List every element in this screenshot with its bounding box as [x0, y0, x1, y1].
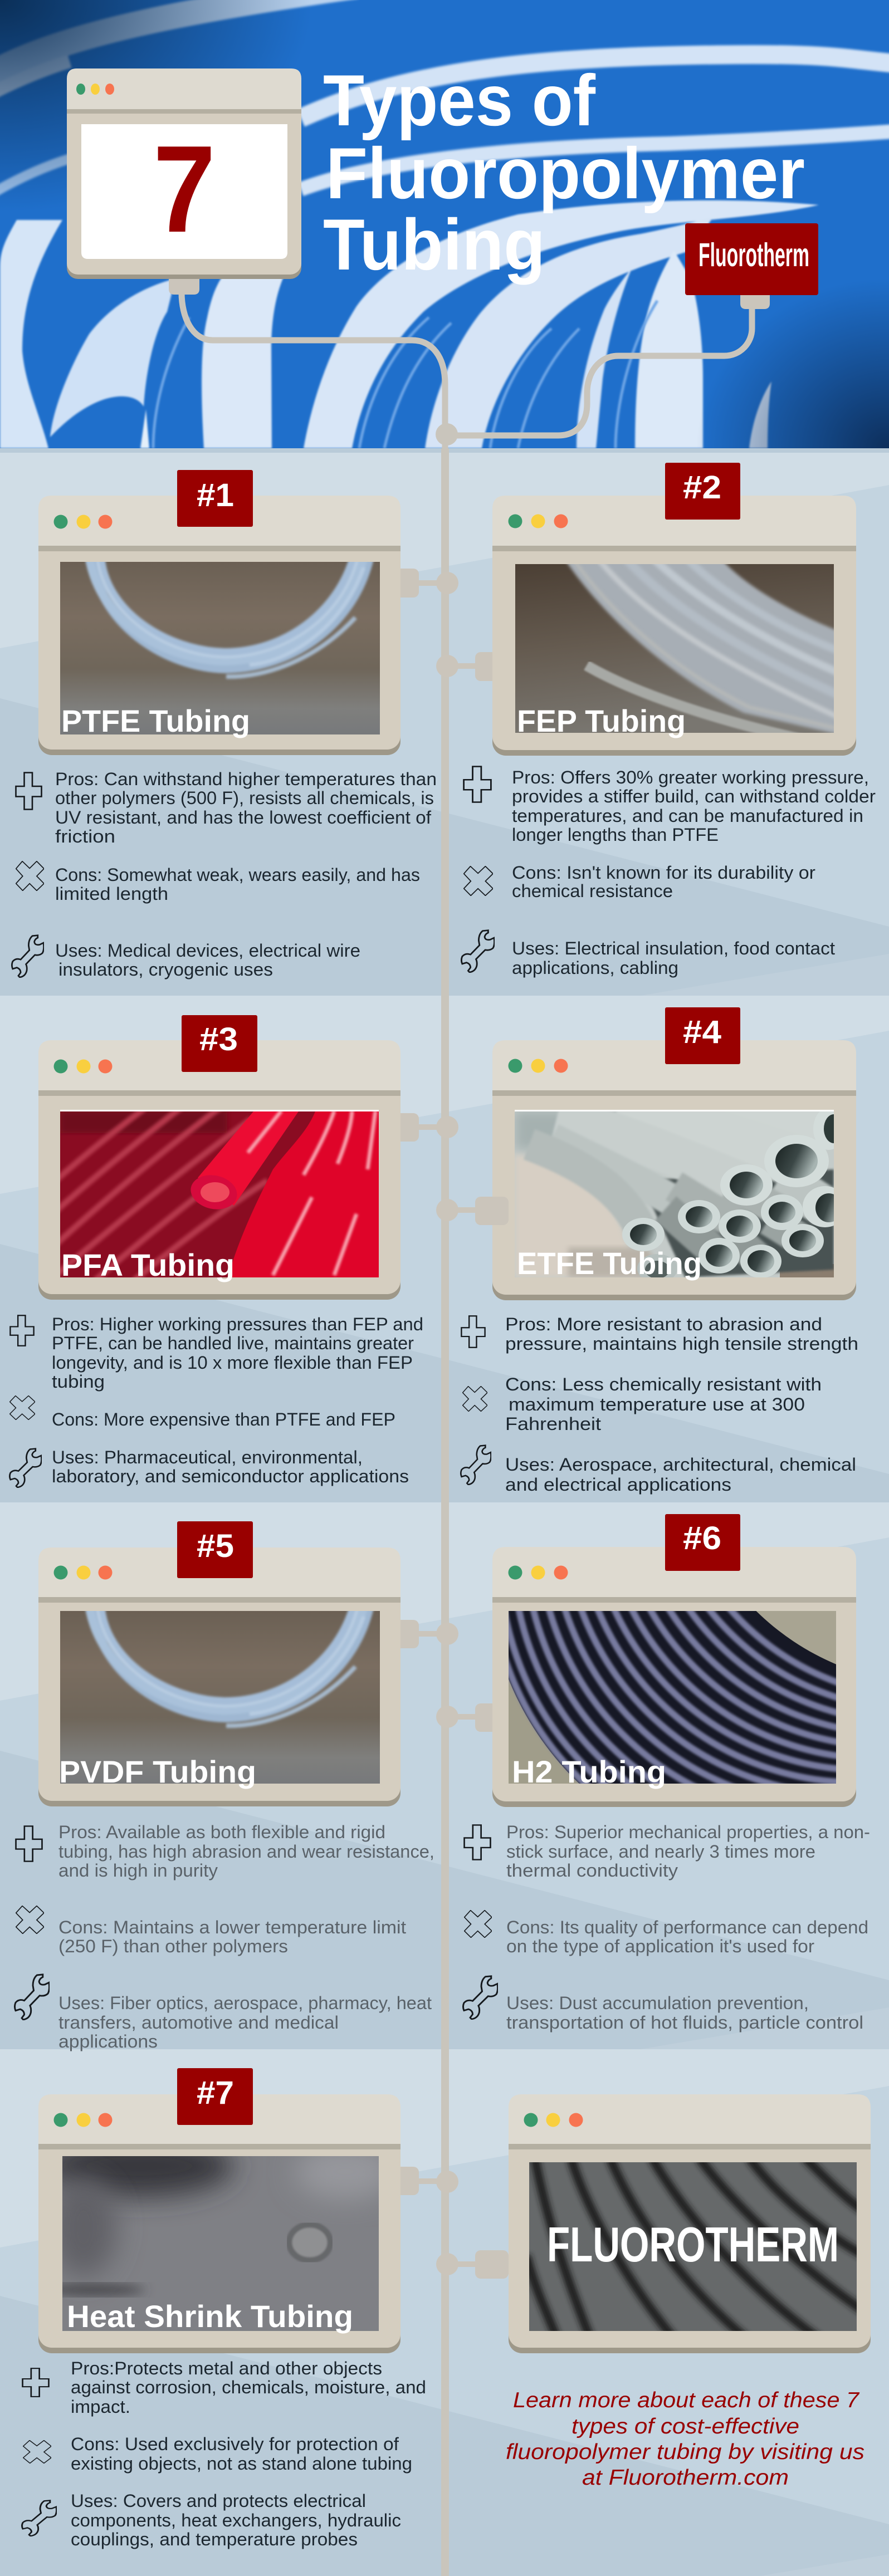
connector	[436, 1703, 498, 1732]
badge: #3	[199, 1021, 238, 1057]
panel: #3 PFA Tubing	[9, 1015, 458, 1487]
title: Tubing	[323, 204, 545, 285]
badge	[177, 2068, 253, 2125]
header window card with number 7	[67, 68, 301, 295]
connector	[395, 1113, 458, 1142]
window dots	[76, 84, 114, 95]
panel: #2 FEP Tubing	[436, 463, 876, 978]
photo	[56, 1105, 384, 1281]
connector	[436, 652, 498, 681]
thin tube	[577, 267, 632, 448]
pros: Pros: More resistant to abrasion and	[505, 1314, 822, 1334]
header background photo: blue tubing	[0, 0, 889, 448]
badge	[177, 1521, 253, 1578]
connector	[436, 1199, 479, 1221]
icon: cross	[465, 1911, 492, 1937]
uses	[71, 2491, 401, 2549]
icon: plus	[461, 1316, 485, 1348]
window	[492, 1547, 856, 1807]
pros: Pros: Offers 30% greater working pressure,	[512, 767, 869, 787]
window	[509, 2094, 871, 2353]
badge: #6	[683, 1520, 721, 1556]
uses: insulators, cryogenic uses	[58, 959, 273, 980]
call to action: at Fluorotherm.com	[582, 2466, 789, 2490]
cons: limited length	[55, 884, 168, 904]
connector cables	[182, 292, 752, 448]
cons: Fahrenheit	[505, 1414, 601, 1434]
photo	[526, 2158, 863, 2339]
uses: applications, cabling	[512, 958, 678, 978]
icon: wrench	[9, 1449, 42, 1487]
connector	[395, 2167, 458, 2195]
cons: Cons: More expensive than PTFE and FEP	[52, 1409, 395, 1429]
left tube	[0, 220, 62, 448]
icon: plus	[16, 1826, 42, 1862]
icon: cross	[10, 1396, 35, 1419]
tube ends	[622, 1111, 834, 1277]
badge	[665, 463, 740, 520]
icon: cross	[23, 2441, 51, 2463]
window	[492, 1040, 856, 1300]
icon: wrench	[22, 2500, 57, 2536]
cons: chemical resistance	[512, 881, 673, 901]
heading: PVDF Tubing	[59, 1754, 256, 1789]
window	[38, 2094, 400, 2353]
cons	[55, 865, 420, 904]
fifth tube	[425, 217, 713, 448]
pros	[512, 767, 876, 845]
icon: plus	[23, 2368, 48, 2397]
pros: tubing	[52, 1372, 105, 1392]
panel: #1 PTFE Tubing	[12, 470, 458, 980]
uses	[55, 941, 360, 980]
photo	[60, 556, 380, 734]
photo	[60, 1605, 380, 1784]
uses: transfers, automotive and medical	[58, 2012, 339, 2033]
cons: on the type of application it's used for	[506, 1936, 814, 1956]
photo top edge	[60, 1110, 379, 1111]
number 7: 7	[153, 120, 216, 258]
icon: wrench	[461, 1446, 491, 1485]
panel: #7 Heat Shrink Tubing	[22, 2068, 458, 2549]
uses: components, heat exchangers, hydraulic	[71, 2510, 401, 2530]
pros: friction	[55, 826, 115, 846]
uses: Uses: Pharmaceutical, environmental,	[52, 1447, 363, 1467]
pros: stick surface, and nearly 3 times more	[506, 1842, 815, 1862]
uses: Uses: Medical devices, electrical wire	[55, 941, 360, 961]
call to action: types of cost-effective	[572, 2415, 799, 2438]
pros	[505, 1314, 858, 1354]
fourth tube	[304, 200, 819, 448]
window	[38, 1040, 400, 1300]
connector	[395, 569, 458, 598]
window	[492, 496, 856, 756]
pros: Pros:Protects metal and other objects	[71, 2358, 382, 2378]
cable: window to spine	[182, 292, 445, 448]
panel: #4 ETFE Tubing	[436, 1007, 858, 1495]
photo top edge	[515, 1110, 834, 1111]
cons: Cons: Used exclusively for protection of	[71, 2434, 399, 2454]
badge	[182, 1015, 257, 1072]
uses: and electrical applications	[505, 1475, 731, 1495]
icon: cross	[16, 1906, 44, 1933]
tapered tube	[749, 381, 771, 448]
cons: Cons: Somewhat weak, wears easily, and has	[55, 865, 420, 885]
cons	[58, 1917, 406, 1956]
photo	[515, 1111, 834, 1277]
panel: Fluorotherm brand card	[436, 2094, 871, 2353]
window	[38, 496, 400, 755]
cons	[505, 1374, 822, 1434]
sixth tube	[635, 251, 703, 448]
icon: wrench	[461, 931, 495, 972]
cons: maximum temperature use at 300	[509, 1394, 805, 1414]
call to action: fluoropolymer tubing by visiting us	[506, 2440, 864, 2464]
pros: Pros: Superior mechanical properties, a non-	[506, 1822, 870, 1842]
connector	[395, 1620, 458, 1648]
heading: PFA Tubing	[61, 1247, 235, 1282]
badge: #4	[683, 1014, 721, 1050]
Fluorotherm logo badge	[685, 223, 818, 309]
heading: FEP Tubing	[517, 703, 686, 738]
heading: PTFE Tubing	[61, 703, 250, 738]
cons: (250 F) than other polymers	[58, 1936, 288, 1956]
connector	[436, 2250, 509, 2279]
pros: pressure, maintains high tensile strength	[505, 1334, 858, 1354]
icon: plus	[465, 1825, 490, 1860]
cons: Cons: Maintains a lower temperature limit	[58, 1917, 406, 1937]
third tube	[202, 276, 284, 448]
uses: Uses: Aerospace, architectural, chemical	[505, 1454, 856, 1475]
heading: ETFE Tubing	[517, 1246, 702, 1281]
pros: temperatures, and can be manufactured in	[512, 806, 863, 826]
pros	[506, 1822, 870, 1880]
uses	[52, 1447, 409, 1486]
icon: wrench	[12, 936, 44, 977]
pros: other polymers (500 F), resists all chemicals, is	[55, 788, 434, 808]
cons	[71, 2434, 412, 2474]
icon: cross	[16, 861, 44, 890]
photo	[509, 1611, 836, 1784]
cable: logo to spine	[454, 307, 752, 435]
badge: #1	[197, 477, 234, 513]
title	[323, 60, 805, 285]
pros: against corrosion, chemicals, moisture, and	[71, 2377, 426, 2397]
photo	[45, 2136, 395, 2331]
pros: tubing, has high abrasion and wear resistance,	[58, 1842, 434, 1862]
call to action	[506, 2388, 864, 2490]
uses	[505, 1454, 856, 1495]
icon: plus	[10, 1315, 34, 1346]
pros: longer lengths than PTFE	[512, 825, 719, 845]
cons: Cons: Its quality of performance can depend	[506, 1917, 868, 1937]
uses: Uses: Electrical insulation, food contact	[512, 938, 835, 958]
cons	[506, 1917, 868, 1956]
call to action: Learn more about each of these 7	[513, 2388, 859, 2412]
pros: UV resistant, and has the lowest coefficient of	[55, 807, 431, 827]
badge	[177, 470, 253, 527]
cons: Cons: Less chemically resistant with	[505, 1374, 822, 1394]
pros: provides a stiffer build, can withstand colder	[512, 786, 876, 806]
pros: Pros: Can withstand higher temperatures than	[55, 769, 437, 789]
title: Types of	[323, 60, 596, 141]
badge: #2	[683, 469, 721, 506]
badge: #7	[197, 2075, 234, 2111]
pros: PTFE, can be handled live, maintains greater	[52, 1333, 414, 1353]
uses	[506, 1993, 863, 2033]
uses: Uses: Covers and protects electrical	[71, 2491, 366, 2511]
uses: couplings, and temperature probes	[71, 2529, 358, 2549]
badge: #5	[197, 1528, 234, 1564]
pros: thermal conductivity	[506, 1860, 678, 1880]
icon: plus	[464, 766, 491, 802]
heading: H2 Tubing	[512, 1754, 666, 1789]
window	[38, 1547, 400, 1806]
badge	[665, 1514, 740, 1571]
second tube	[50, 278, 175, 437]
uses: applications	[58, 2031, 158, 2051]
uses: laboratory, and semiconductor applications	[52, 1466, 409, 1486]
cons: existing objects, not as stand alone tubing	[71, 2453, 412, 2474]
icon: wrench	[14, 1975, 50, 2020]
cons: Cons: Isn't known for its durability or	[512, 863, 815, 883]
uses	[58, 1993, 432, 2051]
connector tab	[475, 1197, 509, 1225]
icon: cross	[464, 866, 493, 895]
cons	[512, 863, 815, 901]
pros: longevity, and is 10 x more flexible than FEP	[52, 1353, 413, 1373]
pros: Pros: Higher working pressures than FEP and	[52, 1314, 423, 1334]
heading: Heat Shrink Tubing	[67, 2299, 353, 2334]
icon: plus	[16, 773, 41, 810]
uses	[512, 938, 835, 978]
pros	[55, 769, 437, 846]
uses: transportation of hot fluids, particle control	[506, 2012, 863, 2033]
pros: and is high in purity	[58, 1860, 218, 1880]
panel: #6 H2 Tubing	[436, 1514, 869, 2033]
tubes	[529, 1105, 829, 1261]
icon: wrench	[463, 1976, 498, 2019]
uses: Uses: Fiber optics, aerospace, pharmacy, heat	[58, 1993, 432, 2013]
pros	[71, 2358, 426, 2417]
icon: cross	[463, 1387, 487, 1411]
pros	[58, 1822, 434, 1880]
pros: Pros: Available as both flexible and rigid	[58, 1822, 385, 1842]
header connector node	[436, 423, 458, 445]
pros	[52, 1314, 423, 1392]
badge	[665, 1007, 740, 1064]
photo	[515, 560, 841, 741]
panel: #5 PVDF Tubing	[14, 1521, 458, 2051]
Fluorotherm logo badge: Fluorotherm	[698, 237, 809, 273]
pros: impact.	[71, 2397, 130, 2417]
title: Fluoropolymer	[326, 133, 805, 214]
uses: Uses: Dust accumulation prevention,	[506, 1993, 809, 2013]
central spine line	[441, 448, 449, 2576]
